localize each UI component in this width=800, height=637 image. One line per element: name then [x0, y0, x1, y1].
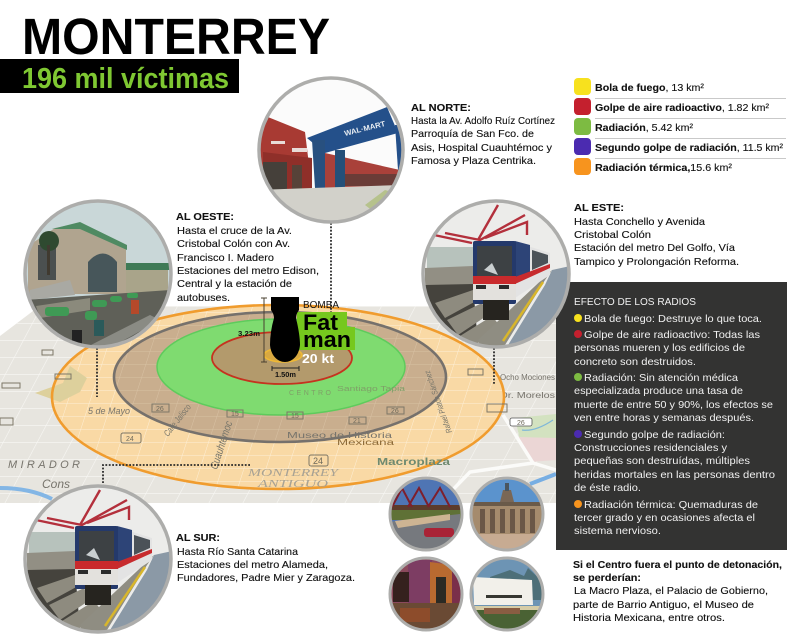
- icon: Fat Man bomb silhouette: [270, 297, 300, 362]
- effect: radiation: [574, 372, 773, 424]
- photo: bus station west: [24, 200, 172, 348]
- bomb width dimension: 1.50m: [275, 370, 296, 379]
- text block: west: Hasta el cruce de la Av.: [177, 225, 292, 237]
- city map background: MIRADOR: [8, 459, 80, 471]
- map labels: 26: [517, 420, 525, 427]
- text block: west: Francisco I. Madero: [177, 252, 274, 264]
- photo: Museo de Historia Mexicana: [470, 557, 546, 633]
- legend item: thermal radiation: [574, 158, 733, 175]
- photo: Palacio de Gobierno: [470, 477, 546, 554]
- text block: east: Estación del metro Del Golfo, Vía: [574, 242, 735, 254]
- blast radius: thermal radiation: [35, 305, 504, 489]
- blast radius: radiation: [157, 319, 405, 415]
- photo: Wal-Mart north: [255, 77, 404, 225]
- text block: north: Asis, Hospital Cuauhtémoc y: [411, 142, 553, 154]
- map labels: 15: [291, 413, 299, 420]
- photo: Barrio Antiguo: [388, 557, 464, 633]
- bomb label: Fat man: man: [303, 327, 351, 352]
- text block: east: [574, 202, 739, 268]
- effect: radiation: muerte de entre 50 y 90%, los efectos se: [574, 399, 773, 411]
- text block: east: Hasta Conchello y Avenida: [574, 216, 705, 228]
- bomb height dimension: 3.23m: [238, 329, 260, 338]
- text block: detonation note: se perderían:: [573, 572, 641, 584]
- text block: detonation note: La Macro Plaza, el Palacio de Gobierno,: [574, 585, 768, 597]
- legend item: fireball: [574, 78, 704, 95]
- text block: detonation note: Historia Mexicana, entre otros.: [573, 612, 725, 624]
- effect: radiation: Radiación: Sin atención médica: [584, 372, 738, 384]
- map labels: Macroplaza: [377, 457, 451, 468]
- city map background: Dr. Morelos: [500, 391, 555, 400]
- connector lines: [97, 223, 494, 486]
- text block: detonation note: [573, 559, 782, 624]
- effect: radioactive air blow: [574, 329, 760, 368]
- legend item: second radiation blow: [574, 138, 784, 155]
- blast radius: second radiation blow: [114, 312, 446, 442]
- subtitle bar: 196 mil víctimas: [22, 63, 229, 95]
- city map background: Ocho Mociones: [500, 373, 555, 382]
- effect: thermal radiation: sistema nervioso.: [574, 525, 661, 537]
- text block: north: AL NORTE:: [411, 102, 471, 114]
- text block: south: [176, 532, 355, 584]
- text block: west: Cristobal Colón con Av.: [177, 238, 290, 250]
- panel: effect of radii: [556, 282, 787, 550]
- effect: second radiation blow: pequeñas son destruídas, múltiples: [574, 455, 750, 467]
- text block: north: Hasta la Av. Adolfo Ruíz Cortínez: [411, 115, 555, 127]
- text block: west: Estaciones del metro Edison,: [177, 265, 319, 277]
- bomb width dimension: [272, 366, 299, 379]
- map labels: 26: [156, 406, 164, 413]
- legend item: fireball: Bola de fuego, 13 km²: [595, 82, 704, 94]
- legend item: radioactive air blow: [574, 98, 770, 115]
- text block: detonation note: Si el Centro fuera el punto de detonación,: [573, 559, 782, 571]
- legend: [574, 78, 786, 175]
- effect: fireball: Bola de fuego: Destruye lo que toca.: [584, 313, 762, 325]
- map labels: 15: [231, 411, 239, 418]
- legend item: thermal radiation: Radiación térmica,15.6 km²: [595, 162, 733, 174]
- map labels: MONTERREY: [246, 468, 340, 479]
- blast radius: fireball: [264, 348, 302, 362]
- text block: east: Cristobal Colón: [574, 229, 651, 241]
- text block: west: autobuses.: [177, 292, 230, 304]
- text block: south: Estaciones del metro Alameda,: [177, 559, 328, 571]
- map labels: Santiago Tapia: [337, 386, 405, 393]
- photo: metro south: [22, 483, 177, 635]
- text block: north: Famosa y Plaza Centrika.: [411, 155, 536, 167]
- text block: west: AL OESTE:: [176, 211, 234, 223]
- map labels: CENTRO: [289, 390, 332, 397]
- text block: east: AL ESTE:: [574, 202, 624, 214]
- text block: north: Parroquía de San Fco. de: [411, 128, 534, 140]
- city map background: [0, 306, 556, 503]
- map labels: 24: [126, 436, 134, 443]
- text block: east: Tampico y Prolongación Reforma.: [574, 256, 739, 268]
- photo: metro east: [420, 198, 575, 350]
- panel: effect of radii: EFECTO DE LOS RADIOS: [574, 296, 696, 308]
- title: MONTERREY: [22, 8, 330, 65]
- map labels: 26: [391, 408, 399, 415]
- text block: south: Fundadores, Padre Mier y Zaragoza.: [177, 572, 355, 584]
- effect: radioactive air blow: personas mueren y los edificios de: [574, 342, 745, 354]
- effect: second radiation blow: heridas mortales en las personas dentro: [574, 469, 775, 481]
- effect: radiation: ven entre horas y semanas después.: [574, 412, 754, 424]
- map labels: ANTIGUO: [256, 479, 328, 490]
- legend item: radiation: [574, 118, 694, 135]
- map labels: Museo de Historia: [287, 431, 393, 440]
- effect: second radiation blow: de éste radio.: [574, 482, 641, 494]
- legend item: second radiation blow: Segundo golpe de radiación, 11.5 km²: [595, 142, 784, 154]
- effect: radiation: especializada produce una tasa de: [574, 385, 743, 397]
- text block: west: Central y la estación de: [177, 278, 292, 290]
- city map background: Cons: [42, 477, 70, 491]
- text block: south: AL SUR:: [176, 532, 220, 544]
- effect: radioactive air blow: concreto son destruidos.: [574, 356, 696, 368]
- bomb label: Fat man: BOMBA: [303, 300, 339, 311]
- text block: north: [411, 102, 555, 167]
- bomb height dimension: [238, 298, 267, 362]
- blast radius: radioactive air blow: [212, 332, 352, 384]
- photo: Macro Plaza bridge: [388, 477, 464, 553]
- bomb label: Fat man: Fat: [303, 310, 339, 335]
- effect: second radiation blow: [574, 429, 775, 494]
- photo: Wal-Mart north: WAL·MART: [343, 119, 387, 138]
- map labels: Rafael Platón Sánchez: [423, 369, 454, 434]
- text block: south: Hasta Río Santa Catarina: [177, 546, 298, 558]
- effect: second radiation blow: Segundo golpe de radiación:: [584, 429, 725, 441]
- effect: thermal radiation: Radiación térmica: Quemaduras de: [584, 499, 758, 511]
- legend item: radioactive air blow: Golpe de aire radioactivo, 1.82 km²: [595, 102, 770, 114]
- text block: detonation note: parte de Barrio Antiguo, el Museo de: [573, 599, 754, 611]
- map labels: 21: [353, 418, 361, 425]
- effect: second radiation blow: Construcciones residenciales y: [574, 442, 728, 454]
- map labels: Cuauhtémoc: [208, 419, 235, 471]
- map labels: [0, 350, 532, 490]
- bomb label: Fat man: 20 kt: [302, 351, 335, 366]
- map labels: Mexicana: [337, 438, 395, 447]
- text block: west: [176, 211, 319, 304]
- bomb label: Fat man: [297, 300, 355, 366]
- map labels: 5 de Mayo: [88, 406, 130, 416]
- legend item: radiation: Radiación, 5.42 km²: [595, 122, 694, 134]
- effect: thermal radiation: [574, 499, 758, 537]
- effect: radioactive air blow: Golpe de aire radioactivo: Todas las: [584, 329, 760, 341]
- effect: thermal radiation: tercer grado y en ocasiones afecta el: [574, 512, 755, 524]
- map labels: 24: [313, 456, 323, 466]
- map labels: Calle Jalisco: [162, 402, 193, 438]
